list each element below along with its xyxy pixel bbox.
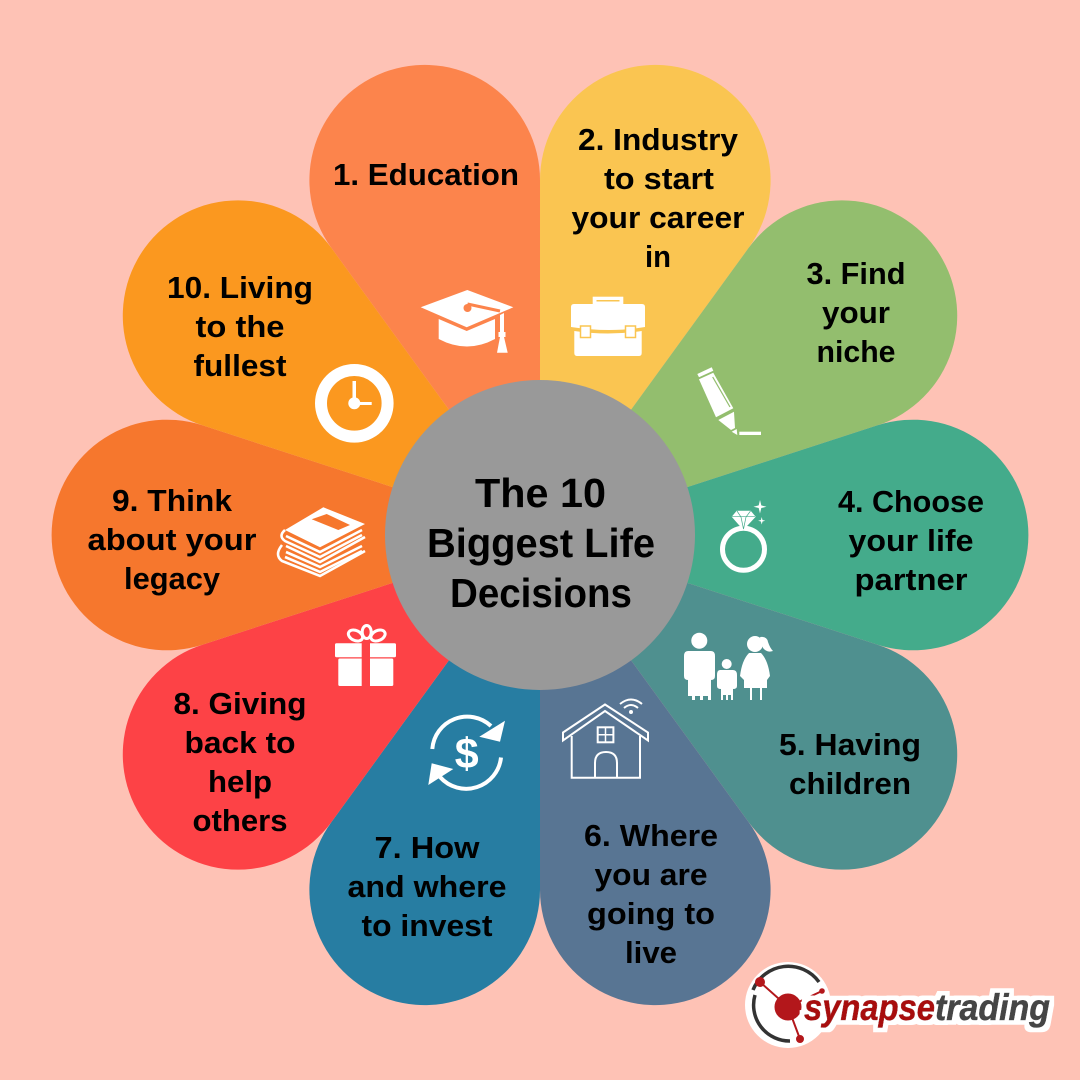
icon: family (684, 633, 773, 700)
text: life partner label: your life (848, 523, 974, 558)
icon: diamond ring (722, 500, 766, 570)
icon: graduation cap (421, 290, 513, 353)
panel: center circle title: Decisions (450, 570, 632, 616)
text: giving back label: others (192, 803, 288, 838)
panel: petal 7 invest (309, 535, 540, 1005)
panel: petal 5 children (540, 535, 957, 870)
text: living label: fullest (194, 348, 286, 383)
icon: dollar cycle (428, 717, 505, 789)
text: niche label: niche (816, 334, 896, 369)
panel: petal 6 where to live (540, 535, 771, 1005)
text: industry label (572, 122, 744, 274)
text: invest label (348, 830, 506, 943)
text: invest label: 7. How (374, 830, 480, 865)
text: legacy label: legacy (124, 561, 221, 596)
text: children label: 5. Having (779, 727, 921, 762)
text: invest label: to invest (362, 908, 492, 943)
text: industry label: your career (572, 200, 744, 235)
panel: center circle title: The 10 (475, 470, 606, 516)
text: giving back label (174, 686, 306, 838)
icon: briefcase (571, 297, 645, 356)
text: invest label: and where (348, 869, 506, 904)
icon: marker pen (697, 367, 761, 435)
logo: synapse trading (745, 962, 1050, 1048)
panel: petal 8 giving back (123, 535, 540, 870)
panel: petal 1 education (309, 65, 540, 535)
panel: petal 2 industry (540, 65, 771, 535)
text: industry label: in (645, 239, 671, 274)
icon: dollar cycle: $ (455, 730, 479, 778)
text: life partner label (838, 484, 984, 597)
icon: smart house (563, 700, 648, 778)
text: giving back label: back to (184, 725, 296, 760)
panel: center circle title: Biggest Life (427, 520, 655, 566)
panel: center circle title (385, 380, 695, 690)
logo: synapse trading: trading (935, 987, 1050, 1028)
text: education label: 1. Education (333, 157, 519, 192)
text: niche label: your (822, 295, 890, 330)
text: giving back label: 8. Giving (174, 686, 306, 721)
text: where to live label: 6. Where (584, 818, 718, 853)
text: where to live label: live (625, 935, 677, 970)
text: niche label: 3. Find (806, 256, 906, 291)
text: living label (167, 270, 313, 383)
icon: stack of books (278, 507, 365, 576)
text: life partner label: partner (854, 562, 968, 597)
text: legacy label: 9. Think (112, 483, 233, 518)
text: legacy label: about your (88, 522, 256, 557)
text: life partner label: 4. Choose (838, 484, 984, 519)
text: children label: children (789, 766, 911, 801)
text: living label: to the (196, 309, 284, 344)
panel: petal 4 life partner (540, 420, 1028, 650)
text: living label: 10. Living (167, 270, 313, 305)
text: where to live label: going to (587, 896, 715, 931)
panel: petal 9 legacy (52, 420, 540, 650)
text: niche label (806, 256, 906, 369)
text: industry label: 2. Industry (578, 122, 739, 157)
text: where to live label: you are (594, 857, 708, 892)
logo: synapse trading: synapse (804, 987, 935, 1028)
text: legacy label (88, 483, 256, 596)
panel: petal 10 living fully (123, 200, 540, 535)
icon: clock (321, 370, 388, 437)
panel: petal 3 niche (540, 200, 957, 535)
text: children label (779, 727, 921, 801)
text: industry label: to start (604, 161, 714, 196)
text: giving back label: help (208, 764, 272, 799)
text: where to live label (584, 818, 718, 970)
icon: gift box (335, 626, 396, 687)
